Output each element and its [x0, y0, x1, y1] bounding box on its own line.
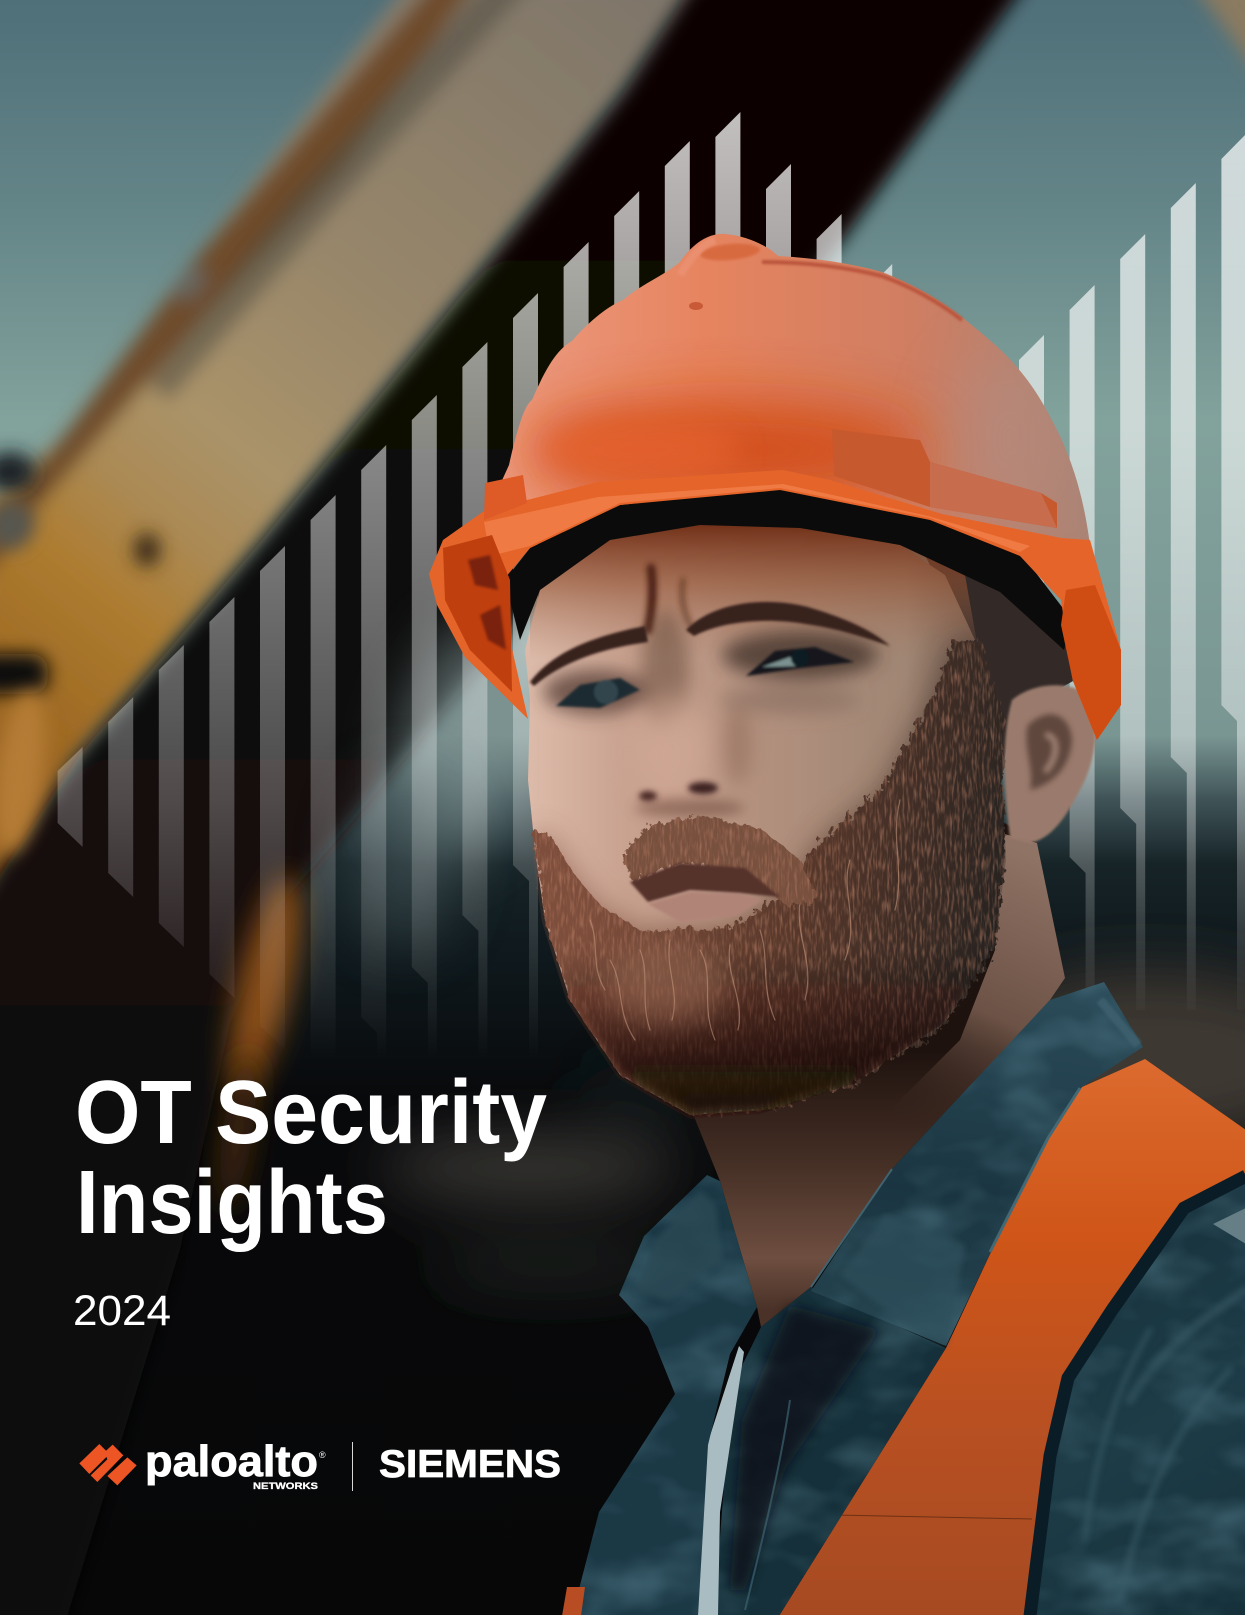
- hair and sideburn: [925, 555, 1073, 800]
- logo: Siemens: SIEMENS: [379, 1443, 561, 1486]
- white undershirt: [696, 1346, 744, 1616]
- title: OT Security Insights: [75, 1063, 547, 1253]
- right vest panel: [779, 1059, 1246, 1616]
- jacket left side and collar: [562, 1175, 757, 1616]
- neck: [693, 820, 1065, 1327]
- helmet dome: [484, 234, 1090, 545]
- face: [525, 515, 1096, 1115]
- logo: Palo Alto Networks: NETWORKS: [253, 1481, 318, 1492]
- jacket right side: [1025, 1173, 1246, 1616]
- grey-teal haze: [378, 609, 552, 871]
- brown ground on the right: [960, 970, 1246, 1150]
- orange blurred machine arm: [214, 870, 316, 1100]
- ear: [1005, 685, 1096, 843]
- icon: Palo Alto mark: [79, 1444, 137, 1485]
- helmet side ridge: [832, 429, 1057, 528]
- helmet brim: [429, 470, 1121, 740]
- lower haze: [380, 1060, 700, 1287]
- logo divider: [352, 1442, 353, 1491]
- eyes: [556, 647, 854, 708]
- title: OT Security Insights: Insights: [76, 1153, 388, 1253]
- year: 2024: [73, 1287, 171, 1335]
- helmet underside band: [505, 488, 1072, 650]
- diagonal bar graphic, right group: [1019, 134, 1246, 1010]
- far right boom corner: [1190, 0, 1246, 85]
- title: OT Security Insights: OT Security: [75, 1063, 547, 1163]
- eyebrows: [530, 602, 890, 686]
- crane boom: [0, 0, 705, 910]
- logo: Palo Alto Networks: [79, 1437, 326, 1492]
- blurred machinery details: [0, 452, 160, 857]
- eye sockets: [543, 610, 878, 730]
- moustache: [622, 816, 818, 908]
- logo: Palo Alto Networks: paloalto: [145, 1437, 318, 1486]
- jacket centre placket: [714, 1287, 946, 1616]
- nose: [634, 697, 752, 817]
- logo: Palo Alto Networks: ®: [319, 1450, 326, 1460]
- forehead furrows: [648, 568, 692, 630]
- diagonal bar graphic, left group: [58, 112, 892, 1085]
- jacket right collar: [811, 982, 1143, 1346]
- beard: [533, 640, 1004, 1115]
- mouth: [630, 863, 780, 922]
